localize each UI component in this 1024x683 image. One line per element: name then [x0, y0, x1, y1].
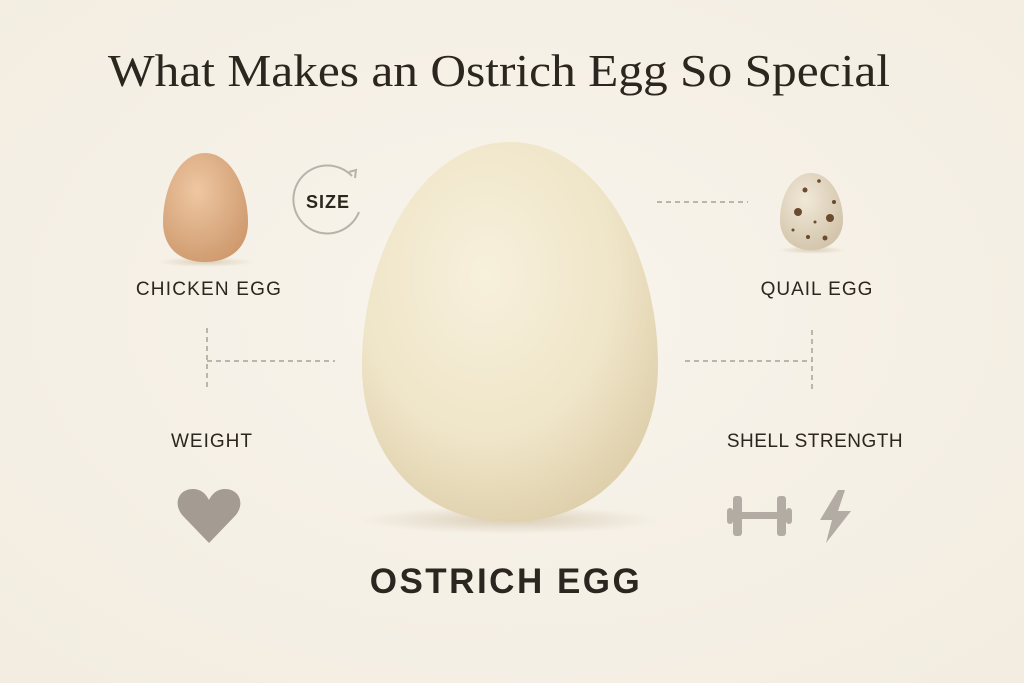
label: shell strength: SHELL STRENGTH: [727, 431, 903, 452]
icon: dumbbell: [727, 496, 792, 536]
chicken egg: [158, 153, 254, 267]
label: quail egg: QUAIL EGG: [761, 279, 873, 300]
title: What Makes an Ostrich Egg So Special: [108, 45, 890, 96]
quail egg: [778, 173, 846, 254]
icon: heart: [178, 489, 240, 543]
label: ostrich egg: OSTRICH EGG: [370, 562, 642, 601]
icon: lightning: [820, 490, 851, 543]
size icon: SIZE: [306, 192, 350, 212]
label: weight: WEIGHT: [171, 431, 253, 452]
size icon: [293, 165, 359, 233]
ostrich egg: [360, 142, 660, 534]
label: chicken egg: CHICKEN EGG: [136, 279, 282, 300]
